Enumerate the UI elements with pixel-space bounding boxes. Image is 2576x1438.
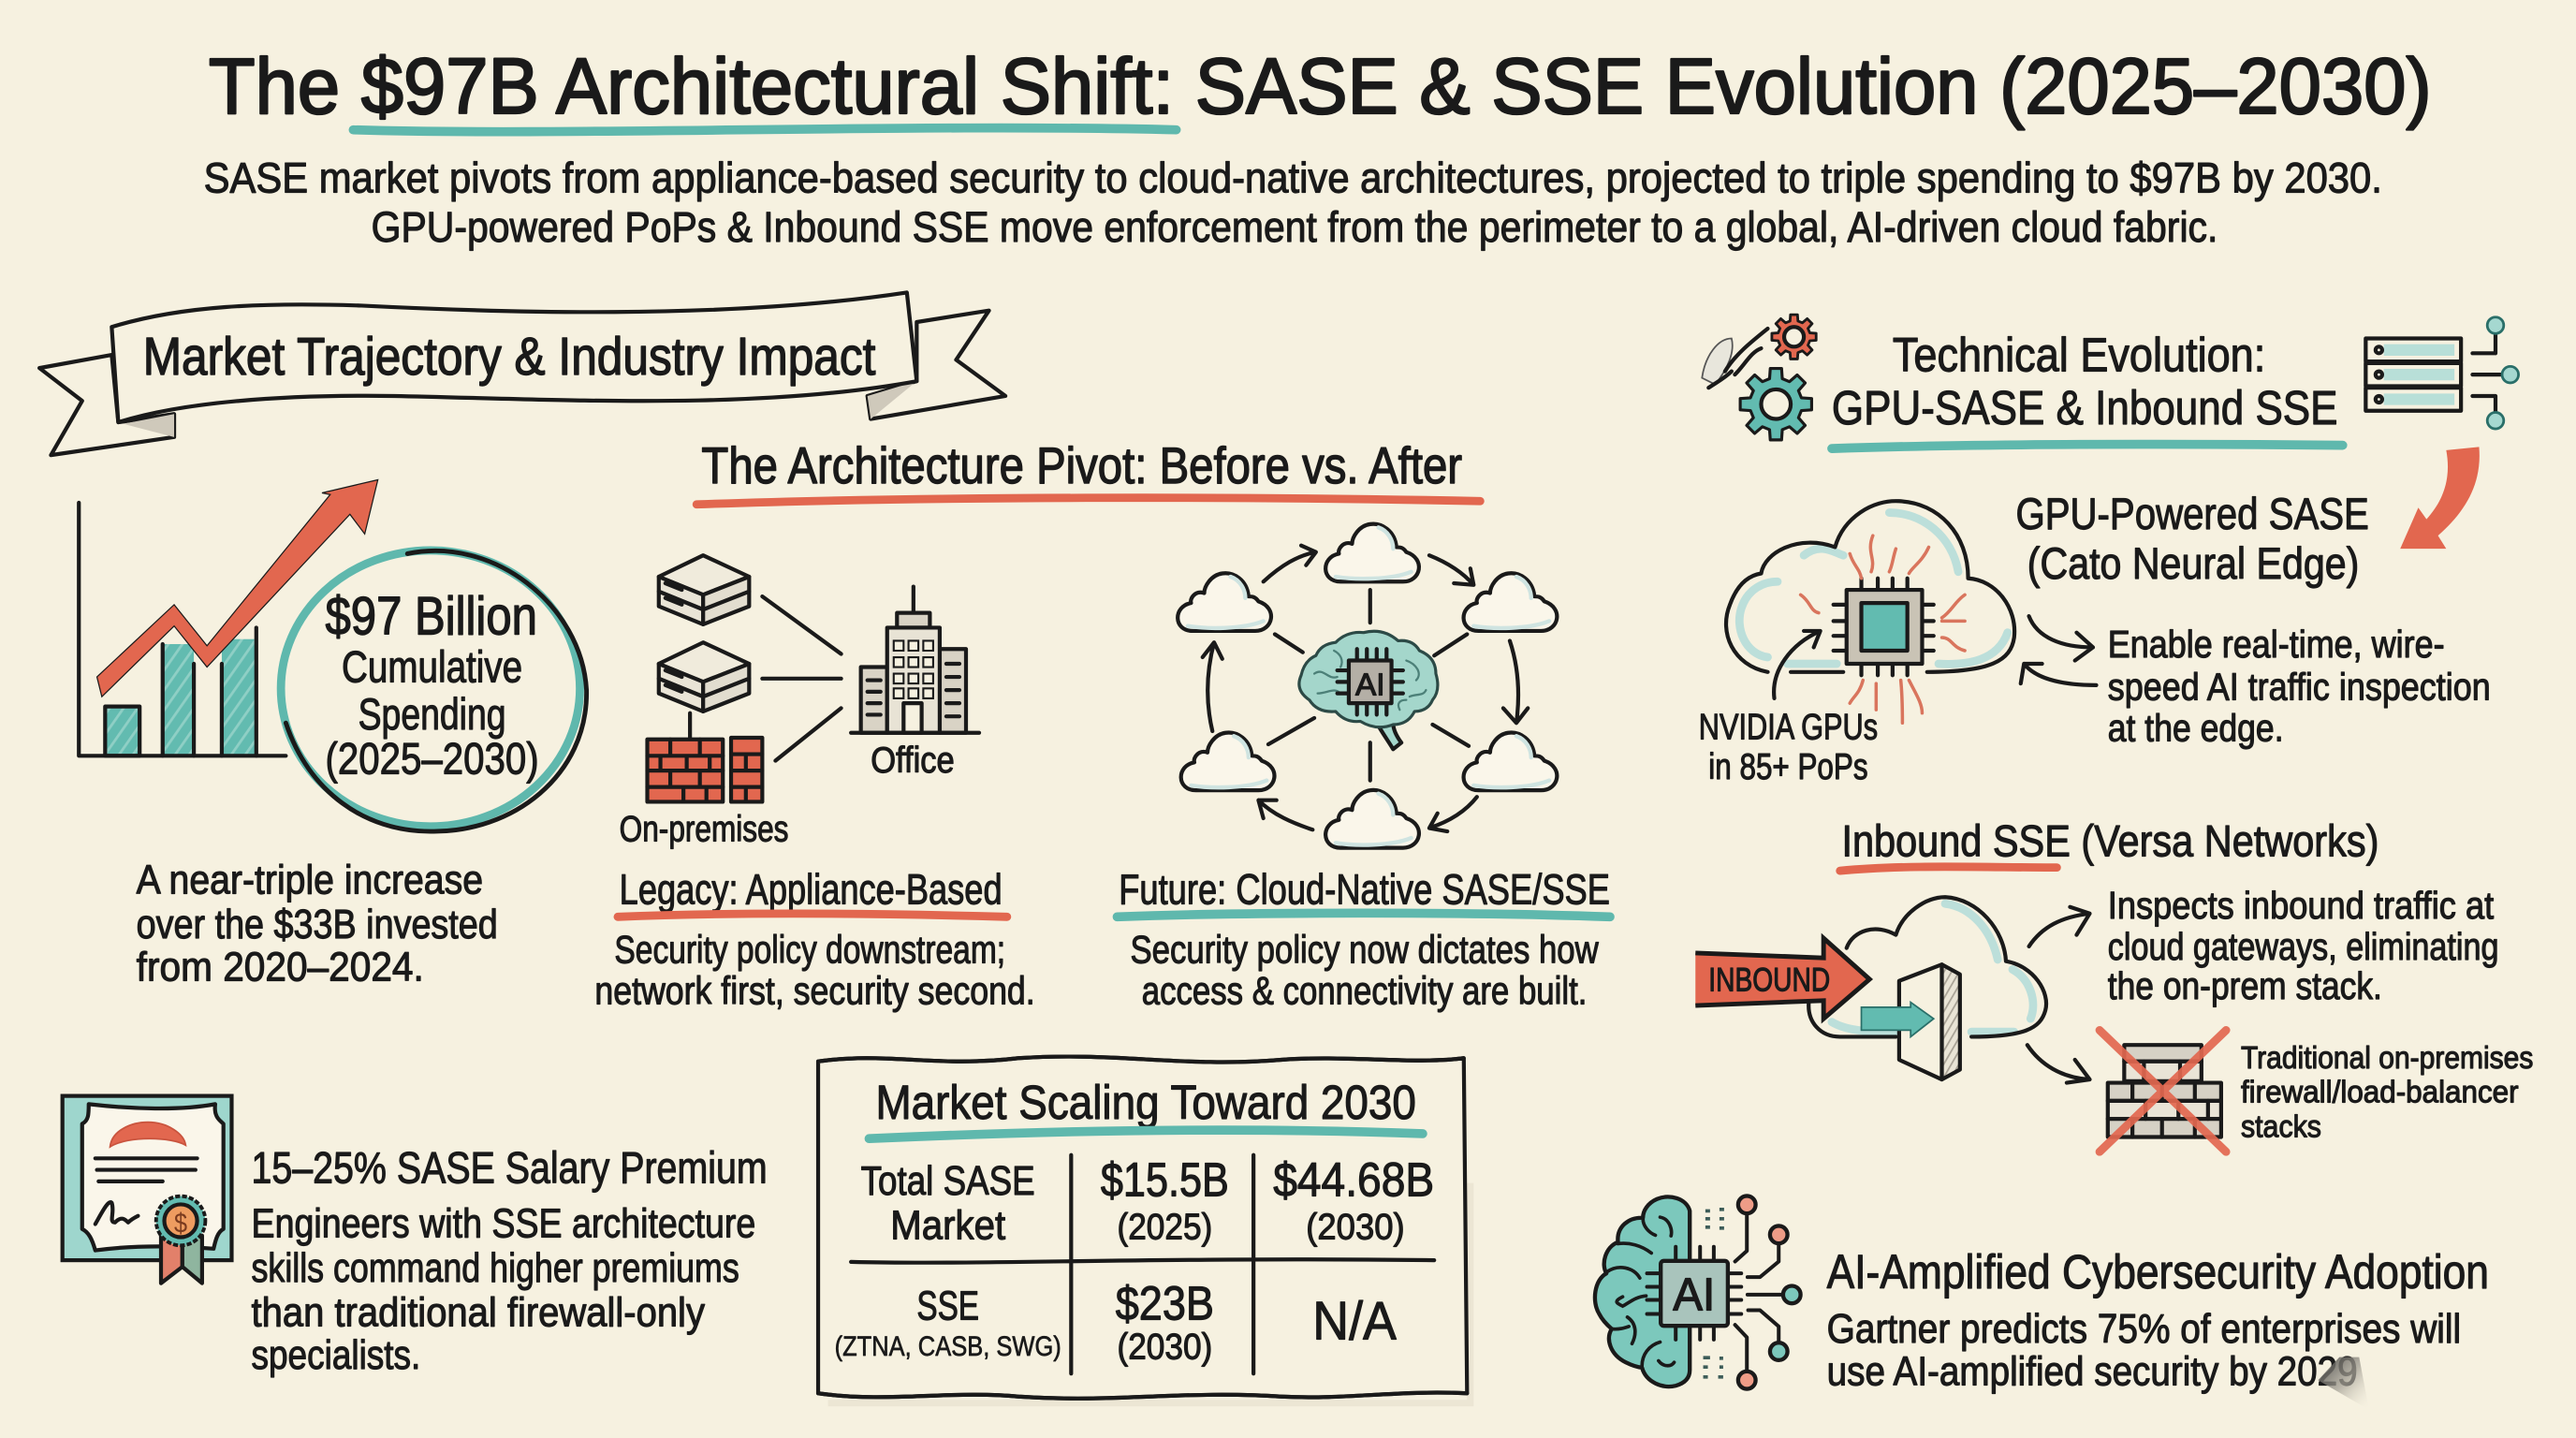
icon: certificate: $ [174,1208,187,1239]
heading: technical evolution [1832,329,2343,448]
subtitle: SASE market pivots from appliance-based security to cloud-native architectures, projected to triple spending to $97B by 2030. [204,154,2382,201]
text block: legacy: Legacy: Appliance-Based [620,865,1003,913]
row: total SASE market: $15.5B [1101,1153,1229,1207]
text block: legacy: Security policy downstream; [614,927,1005,971]
text block: salary premium [252,1144,768,1378]
text block: future [1117,865,1610,1012]
icon: gears [1702,315,1816,440]
text: traditional stacks: stacks [2241,1109,2321,1144]
text: wire-speed inspection: speed AI traffic inspection [2108,666,2491,709]
text: inspects inbound traffic: cloud gateways, eliminating [2108,925,2499,968]
icon: AI brain circuit: AI [1673,1269,1715,1320]
panel: market trajectory banner [39,292,1005,455]
panel: market trajectory banner: Market Trajectory & Industry Impact [143,327,876,386]
callout: $97 billion circle [281,550,587,831]
text block: future: access & connectivity are built. [1142,968,1587,1012]
arrows: GPU cloud to text [1774,616,2097,698]
callout: $97 billion circle: (2025–2030) [326,735,539,785]
label: on-premises: On-premises [620,810,788,850]
arrow: red curved [2400,447,2480,549]
text block: future: Future: Cloud-Native SASE/SSE [1119,865,1610,913]
row: SSE: $23B [1116,1276,1214,1329]
icon: AI brain: AI [1355,668,1385,702]
row: total SASE market: Total SASE [861,1158,1035,1204]
watermark smudge [2318,1357,2369,1410]
heading: GPU-powered SASE [2016,490,2369,589]
arrow: INBOUND: INBOUND [1708,961,1830,998]
icon: certificate [63,1096,231,1284]
heading: GPU-powered SASE: GPU-Powered SASE [2016,490,2369,539]
title: The $97B Architectural Shift: SASE & SSE Evolution (2025–2030) [209,42,2432,130]
text: near-triple increase: over the $33B invested [137,902,498,947]
row: SSE: (2030) [1117,1327,1212,1367]
panel: market scaling table [818,1057,1471,1403]
text block: AI-amplified adoption: AI-Amplified Cybersecurity Adoption [1827,1245,2489,1299]
text: near-triple increase [137,858,498,990]
row: total SASE market: (2025) [1117,1207,1212,1247]
text: wire-speed inspection: at the edge. [2108,707,2284,750]
text block: salary premium: 15–25% SASE Salary Premium [252,1144,768,1194]
heading: architecture pivot: The Architecture Pivot: Before vs. After [701,437,1462,494]
text block: salary premium: than traditional firewall-only [252,1289,705,1335]
text block: salary premium: skills command higher premiums [252,1245,739,1291]
text: inspects inbound traffic [2108,884,2499,1007]
text block: legacy: network first, security second. [594,968,1035,1012]
row: total SASE market: Market [890,1202,1005,1248]
icon: AI brain [1299,631,1438,749]
heading: inbound SSE: Inbound SSE (Versa Networks) [1841,816,2378,866]
icon: brick firewall [648,738,762,801]
heading: technical evolution: Technical Evolution: [1893,329,2265,382]
text block: future: Security policy now dictates how [1131,927,1599,971]
icon: legacy appliance network [648,555,979,801]
text block: salary premium: Engineers with SSE architecture [252,1201,755,1247]
label: office: Office [871,741,955,781]
text block: AI-amplified adoption: Gartner predicts 75% of enterprises will [1827,1306,2461,1352]
label: NVIDIA GPUs: NVIDIA GPUs [1699,708,1878,748]
icon: AI brain circuit [1595,1196,1801,1389]
text block: salary premium: specialists. [252,1332,420,1378]
text: near-triple increase: A near-triple increase [137,858,483,903]
table title: Market Scaling Toward 2030 [875,1076,1416,1129]
text: inspects inbound traffic: Inspects inbound traffic at [2108,884,2494,927]
heading: GPU-powered SASE: (Cato Neural Edge) [2027,539,2359,589]
bar chart with rising arrow [79,479,378,756]
text: traditional stacks: firewall/load-balancer [2241,1076,2519,1110]
row: SSE [835,1276,1397,1367]
row: SSE: (ZTNA, CASB, SWG) [835,1331,1061,1362]
arrow: INBOUND [1695,938,1869,1019]
row: total SASE market: $44.68B [1273,1153,1434,1207]
callout: $97 billion circle: $97 Billion [326,586,537,646]
icon: server with connectors [2365,317,2519,429]
icon: office building [851,587,979,733]
text block: legacy [594,865,1035,1012]
icon: cloud-native fabric with AI brain [1178,524,1557,848]
row: total SASE market: (2030) [1306,1207,1405,1247]
callout: $97 billion circle: Cumulative [342,642,522,692]
text: near-triple increase: from 2020–2024. [137,945,424,990]
text block: AI-amplified adoption [1827,1245,2489,1394]
row: SSE: N/A [1312,1291,1397,1351]
text: wire-speed inspection: Enable real-time, wire- [2108,623,2445,666]
text block: AI-amplified adoption: use AI-amplified security by 2029 [1827,1348,2358,1394]
text: wire-speed inspection [2108,623,2491,750]
subtitle [204,154,2382,251]
callout: $97 billion circle: Spending [359,690,506,740]
text: traditional stacks [2241,1041,2533,1144]
heading: technical evolution: GPU-SASE & Inbound SSE [1832,381,2338,434]
icon: inbound cloud gateway [1695,897,2046,1079]
row: total SASE market [861,1153,1434,1248]
label: NVIDIA GPUs [1699,708,1878,787]
text: traditional stacks: Traditional on-premises [2241,1041,2533,1076]
icon: crossed-out firewall [2100,1030,2226,1152]
label: NVIDIA GPUs: in 85+ PoPs [1708,747,1868,787]
subtitle: GPU-powered PoPs & Inbound SSE move enforcement from the perimeter to a global, AI-driven cloud fabric. [372,203,2217,251]
text: inspects inbound traffic: the on-prem stack. [2108,964,2382,1007]
row: SSE: SSE [916,1283,979,1328]
arrows: inbound branches [2027,907,2089,1083]
icon: GPU cloud [1726,501,2014,723]
